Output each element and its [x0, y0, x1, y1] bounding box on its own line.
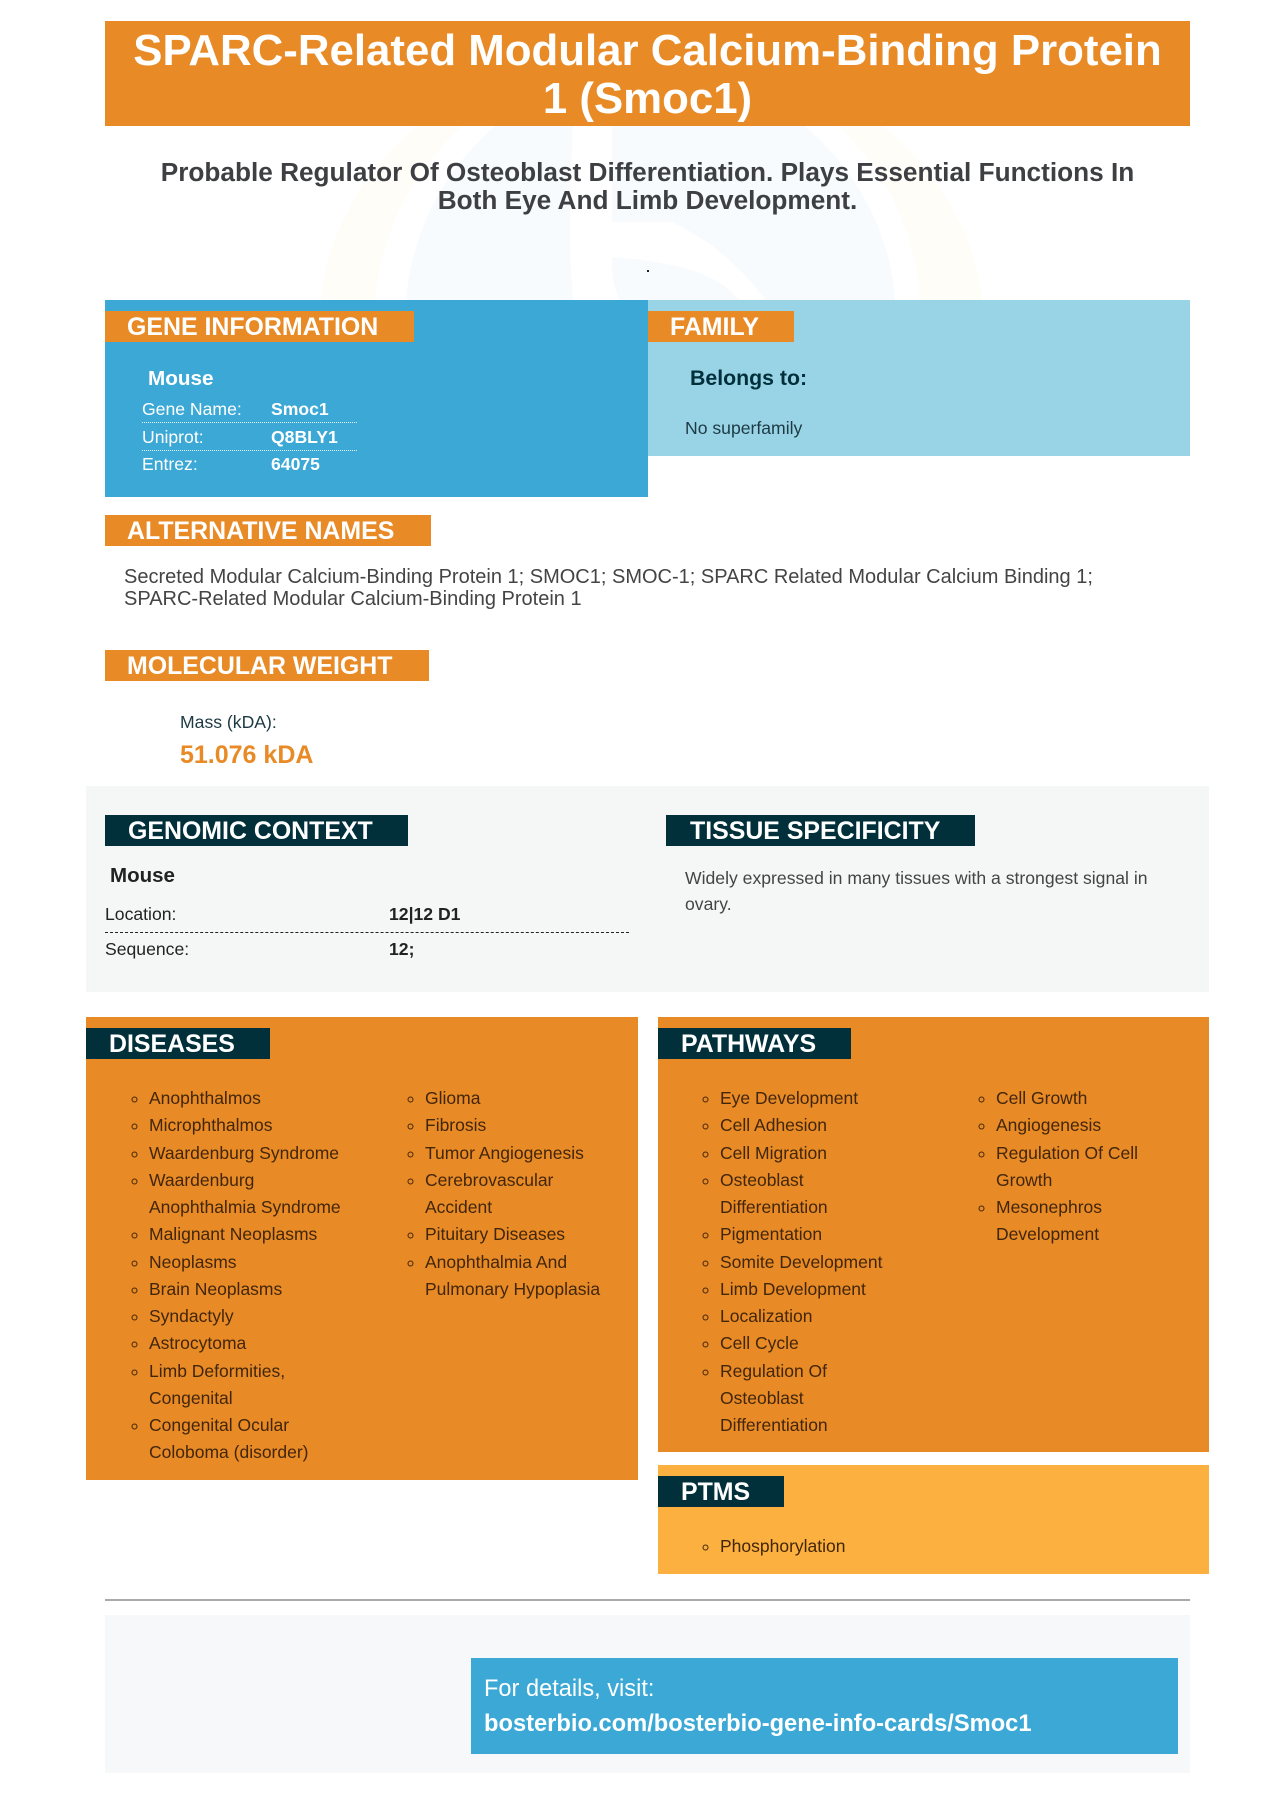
panel: ptms [658, 1465, 1209, 1574]
diseases list column 2: Pituitary Diseases [425, 1224, 565, 1244]
gene name row: Smoc1 [271, 399, 329, 419]
diseases list column 1 [132, 1088, 341, 1462]
species label: Mouse [148, 367, 214, 390]
small dot [647, 270, 649, 272]
pathways list column 2 [978, 1088, 1138, 1244]
pathways list column 2: Angiogenesis [996, 1115, 1101, 1135]
diseases list column 2: Glioma [425, 1088, 480, 1108]
pathways list column 1: Cell Adhesion [720, 1115, 827, 1135]
tissue specificity text [685, 868, 1148, 914]
diseases list column 2 [408, 1088, 600, 1299]
callout: details link [471, 1658, 1178, 1754]
alternative names text: Secreted Modular Calcium-Binding Protein 1; SMOC1; SMOC-1; SPARC Related Modular Calcium Binding 1; [124, 566, 1093, 588]
pathways list column 1: Limb Development [720, 1279, 866, 1299]
heading: ptms [658, 1476, 784, 1507]
diseases list column 1: Brain Neoplasms [149, 1279, 282, 1299]
alternative names text [124, 566, 1093, 610]
heading: pathways: PATHWAYS [681, 1030, 816, 1058]
heading: family: FAMILY [670, 313, 759, 341]
diseases list column 2: Accident [425, 1197, 492, 1217]
panel: gene information [105, 300, 648, 497]
subtitle [161, 157, 1134, 215]
title banner: SPARC-Related Modular Calcium-Binding Protein [133, 26, 1162, 75]
callout url: bosterbio.com/bosterbio-gene-info-cards/Smoc1 [484, 1711, 1032, 1737]
diseases list column 1: Limb Deformities, [149, 1360, 285, 1380]
panel: pathways [658, 1017, 1209, 1452]
belongs to label: Belongs to: [690, 366, 807, 390]
heading: gene information: GENE INFORMATION [127, 313, 378, 341]
pathways list column 1: Localization [720, 1306, 812, 1326]
gene name row: Gene Name: [142, 399, 242, 419]
diseases list column 1: Congenital Ocular [149, 1415, 289, 1435]
heading: molecular weight: MOLECULAR WEIGHT [127, 652, 392, 680]
family value: No superfamily [685, 418, 802, 438]
diseases list column 1: Anophthalmia Syndrome [149, 1197, 341, 1217]
diseases list column 1: Congenital [149, 1388, 233, 1408]
heading: tissue specificity: TISSUE SPECIFICITY [690, 817, 940, 845]
sequence row [105, 939, 414, 959]
pathways list column 1: Differentiation [720, 1415, 828, 1435]
diseases list column 1: Coloboma (disorder) [149, 1442, 309, 1462]
gene name row [142, 396, 357, 423]
diseases list column 2: Pulmonary Hypoplasia [425, 1279, 600, 1299]
diseases list column 1: Microphthalmos [149, 1115, 273, 1135]
pathways list column 1: Eye Development [720, 1088, 858, 1108]
diseases list column 1: Syndactyly [149, 1306, 234, 1326]
heading: family [648, 311, 794, 342]
heading: genomic context: GENOMIC CONTEXT [128, 817, 373, 845]
subtitle: Both Eye And Limb Development. [438, 185, 857, 215]
diseases list column 1: Astrocytoma [149, 1333, 246, 1353]
pathways list column 1: Differentiation [720, 1197, 828, 1217]
alternative names text: SPARC-Related Modular Calcium-Binding Protein 1 [124, 588, 582, 610]
panel: genomic context and tissue specificity [86, 786, 1209, 992]
location row [105, 901, 629, 933]
species label: Mouse [110, 864, 175, 887]
pathways list column 1: Cell Cycle [720, 1333, 799, 1353]
location row: Location: [105, 904, 176, 924]
pathways list column 1: Cell Migration [720, 1142, 827, 1162]
diseases list column 2: Cerebrovascular [425, 1170, 553, 1190]
pathways list column 1: Regulation Of [720, 1360, 827, 1380]
subtitle: Probable Regulator Of Osteoblast Differentiation. Plays Essential Functions In [161, 157, 1134, 187]
heading: ptms: PTMS [681, 1478, 750, 1506]
heading: diseases [86, 1028, 270, 1059]
entrez row: Entrez: [142, 454, 198, 474]
pathways list column 2: Cell Growth [996, 1088, 1087, 1108]
pathways list column 2: Mesonephros [996, 1197, 1102, 1217]
location row: 12|12 D1 [389, 904, 460, 924]
callout label: For details, visit: [484, 1676, 654, 1702]
diseases list column 2: Anophthalmia And [425, 1252, 567, 1272]
entrez row: 64075 [271, 454, 320, 474]
mass label: Mass (kDA): [180, 712, 277, 732]
diseases list column 1: Waardenburg [149, 1170, 254, 1190]
diseases list column 2: Tumor Angiogenesis [425, 1142, 584, 1162]
ptms list: Phosphorylation [720, 1536, 846, 1556]
heading: pathways [658, 1028, 851, 1059]
panel: diseases [86, 1017, 638, 1480]
uniprot row: Q8BLY1 [271, 427, 338, 447]
pathways list column 2: Growth [996, 1170, 1052, 1190]
pathways list column 1 [702, 1088, 882, 1435]
entrez row [142, 454, 320, 474]
pathways list column 1: Osteoblast [720, 1170, 804, 1190]
tissue specificity text: Widely expressed in many tissues with a strongest signal in [685, 868, 1148, 888]
pathways list column 1: Pigmentation [720, 1224, 822, 1244]
uniprot row: Uniprot: [142, 427, 204, 447]
heading: diseases: DISEASES [109, 1030, 235, 1058]
diseases list column 1: Neoplasms [149, 1252, 237, 1272]
pathways list column 2: Regulation Of Cell [996, 1142, 1138, 1162]
heading: alternative names: ALTERNATIVE NAMES [127, 517, 394, 545]
sequence row: 12; [389, 939, 414, 959]
pathways list column 1: Somite Development [720, 1252, 882, 1272]
diseases list column 2: Fibrosis [425, 1115, 486, 1135]
background watermark logo [0, 126, 1288, 300]
diseases list column 1: Waardenburg Syndrome [149, 1142, 339, 1162]
panel: footer [105, 1615, 1190, 1773]
pathways list column 1: Osteoblast [720, 1388, 804, 1408]
diseases list column 1: Anophthalmos [149, 1088, 261, 1108]
title banner: 1 (Smoc1) [543, 74, 752, 123]
panel: family [648, 300, 1190, 456]
mass value: 51.076 kDA [180, 741, 313, 769]
sequence row: Sequence: [105, 939, 189, 959]
tissue specificity text: ovary. [685, 894, 732, 914]
diseases list column 1: Malignant Neoplasms [149, 1224, 317, 1244]
pathways list column 2: Development [996, 1224, 1099, 1244]
uniprot row [142, 424, 357, 451]
title banner [105, 21, 1190, 126]
